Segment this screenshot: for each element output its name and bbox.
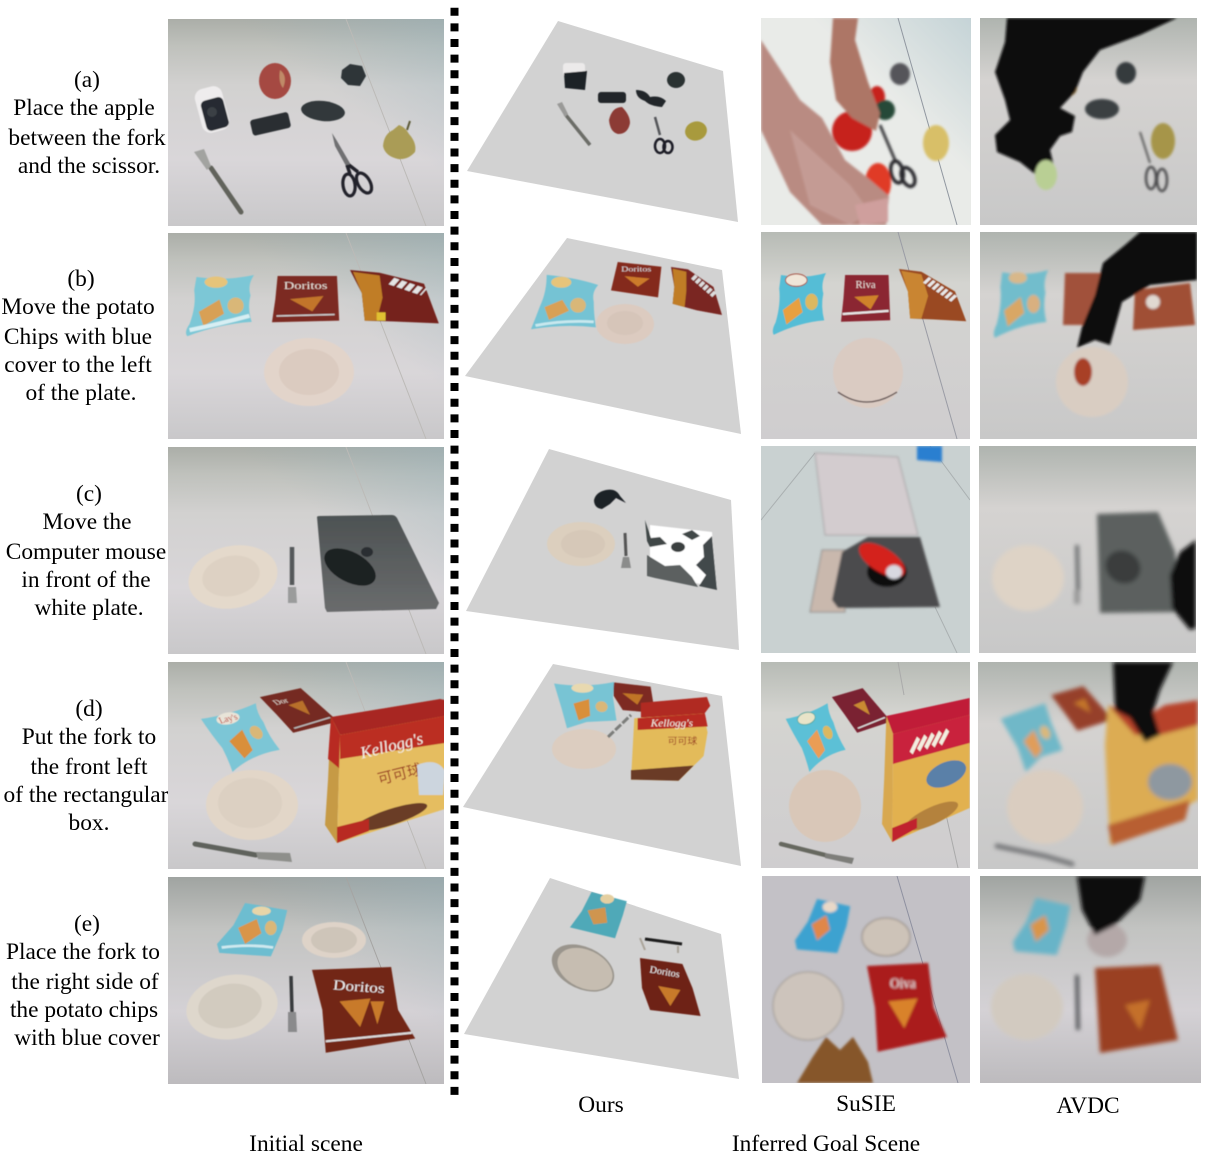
panel: row b ours reconstruction (465, 238, 741, 434)
objects on plane: Doritos (649, 965, 681, 981)
objects: chip bags, plates, hand: Oiva (890, 976, 917, 992)
objects: plate, fork, laptop, mouse (183, 515, 439, 617)
row e: instruction text: (e) (74, 911, 100, 937)
row c: instruction text: (c) (76, 481, 102, 507)
objects: chip bags, plate, fork, cereal box: 可可球 (376, 761, 424, 788)
objects on plane: Kellogg's (650, 719, 693, 729)
laptop fragments (645, 520, 717, 590)
objects: chip bags, plate, fork, cereal box: Kellogg's (357, 729, 425, 763)
row a: instruction text: Place the apple (13, 95, 155, 121)
panel: row b initial scene (168, 233, 444, 439)
objects on plane: 可可球 (668, 736, 698, 747)
row d: instruction text: the front left (31, 754, 148, 780)
objects on plane (557, 63, 709, 153)
panel: row e ours reconstruction (464, 878, 739, 1079)
objects: chip bags, plate, fork, glass, robot (991, 876, 1178, 1053)
label: inferred goal scene: Inferred Goal Scene (732, 1131, 920, 1157)
objects on plane (552, 682, 710, 781)
row d: instruction text (4, 696, 169, 836)
row a: instruction text: (a) (74, 67, 100, 93)
panel: row a ours reconstruction (467, 21, 738, 222)
row e: instruction text: with blue cover (14, 1025, 160, 1051)
row c: instruction text: white plate. (34, 595, 144, 621)
label: initial scene: Initial scene (249, 1131, 363, 1157)
objects: chip bags, plate, fork, cereal box (195, 688, 445, 862)
panel: row e SuSIE (762, 876, 970, 1083)
objects: chip bags, plate, fork, box, robot (997, 662, 1198, 864)
row b: instruction text: Move the potato (1, 294, 155, 320)
objects on plane (544, 892, 701, 1016)
dotted vertical divider (450, 8, 458, 1096)
row b: instruction text: cover to the left (4, 352, 152, 378)
objects: chip bags and plate: Riva (856, 280, 876, 291)
objects: chip bags and plate (773, 269, 966, 408)
row a: instruction text: and the scissor. (18, 153, 160, 179)
panel: row b SuSIE (761, 232, 970, 439)
panel: row d AVDC (978, 662, 1198, 869)
objects: plate, fork, laptop, mouse, robot (992, 512, 1196, 630)
row c: instruction text: Move the (42, 509, 132, 535)
row d: instruction text: (d) (75, 696, 103, 722)
panel: row d initial scene (168, 662, 444, 869)
row b: instruction text: (b) (67, 266, 95, 292)
panel: row a initial scene (168, 19, 444, 226)
objects on plane (531, 262, 722, 344)
panel: row a SuSIE (761, 18, 971, 225)
objects: chip bags, plate, fork, cereal box: Dor (270, 696, 291, 706)
objects: chip bags, plate, fork, cereal box: Lay's (217, 712, 240, 725)
objects: chip bags, plates, fork (181, 903, 415, 1053)
panel: row d SuSIE (761, 662, 970, 868)
row d: instruction text: box. (69, 810, 109, 836)
panel: row e AVDC (980, 876, 1201, 1083)
row a: instruction text (8, 67, 166, 179)
row d: instruction text: Put the fork to (22, 724, 156, 750)
panel: row b AVDC (980, 232, 1197, 439)
row e: instruction text: the right side of (11, 969, 159, 995)
objects: chip bags, plate, robot arm (994, 232, 1197, 417)
objects: chip bags, plate, fork, box (781, 688, 970, 864)
row b: instruction text: Chips with blue (4, 324, 152, 350)
panel: row c ours reconstruction (466, 449, 739, 650)
panel: row c AVDC (979, 446, 1196, 653)
row c: instruction text: in front of the (21, 567, 151, 593)
objects: robot arm, ball, mouse, scissors, pear (995, 18, 1177, 191)
row e: instruction text: the potato chips (10, 997, 158, 1023)
row d: instruction text: of the rectangular (4, 782, 169, 808)
objects: hands, red apples, pear, scissors (761, 18, 949, 225)
objects on plane (547, 490, 717, 590)
label: SuSIE column: SuSIE (836, 1091, 896, 1117)
objects: chip bags and plate: Doritos (284, 280, 328, 291)
panel: row a AVDC (980, 18, 1197, 225)
label: ours column: Ours (578, 1092, 624, 1118)
objects: chip bags, plates, fork: Doritos (332, 978, 385, 997)
row b: instruction text (1, 266, 155, 406)
row a: instruction text: between the fork (8, 125, 166, 151)
row e: instruction text: Place the fork to (6, 939, 160, 965)
objects: camera, apple, mouse, battery, pear, fork, scissors (193, 63, 415, 212)
objects: chip bags, plates, hand (773, 899, 947, 1083)
panel: row e initial scene (168, 877, 444, 1084)
label: AVDC column: AVDC (1056, 1093, 1120, 1119)
row c: instruction text: Computer mouse (6, 539, 166, 565)
panel: row c initial scene (168, 447, 444, 654)
row c: instruction text (6, 481, 166, 621)
panel: row c SuSIE (761, 446, 970, 653)
row b: instruction text: of the plate. (25, 380, 137, 406)
objects on plane: Doritos (621, 265, 652, 273)
objects: chip bags and plate (186, 270, 439, 406)
row e: instruction text (6, 911, 160, 1051)
objects: mat, pad, laptop, red mouse, blue item (810, 446, 942, 612)
panel: row d ours reconstruction (463, 664, 741, 866)
